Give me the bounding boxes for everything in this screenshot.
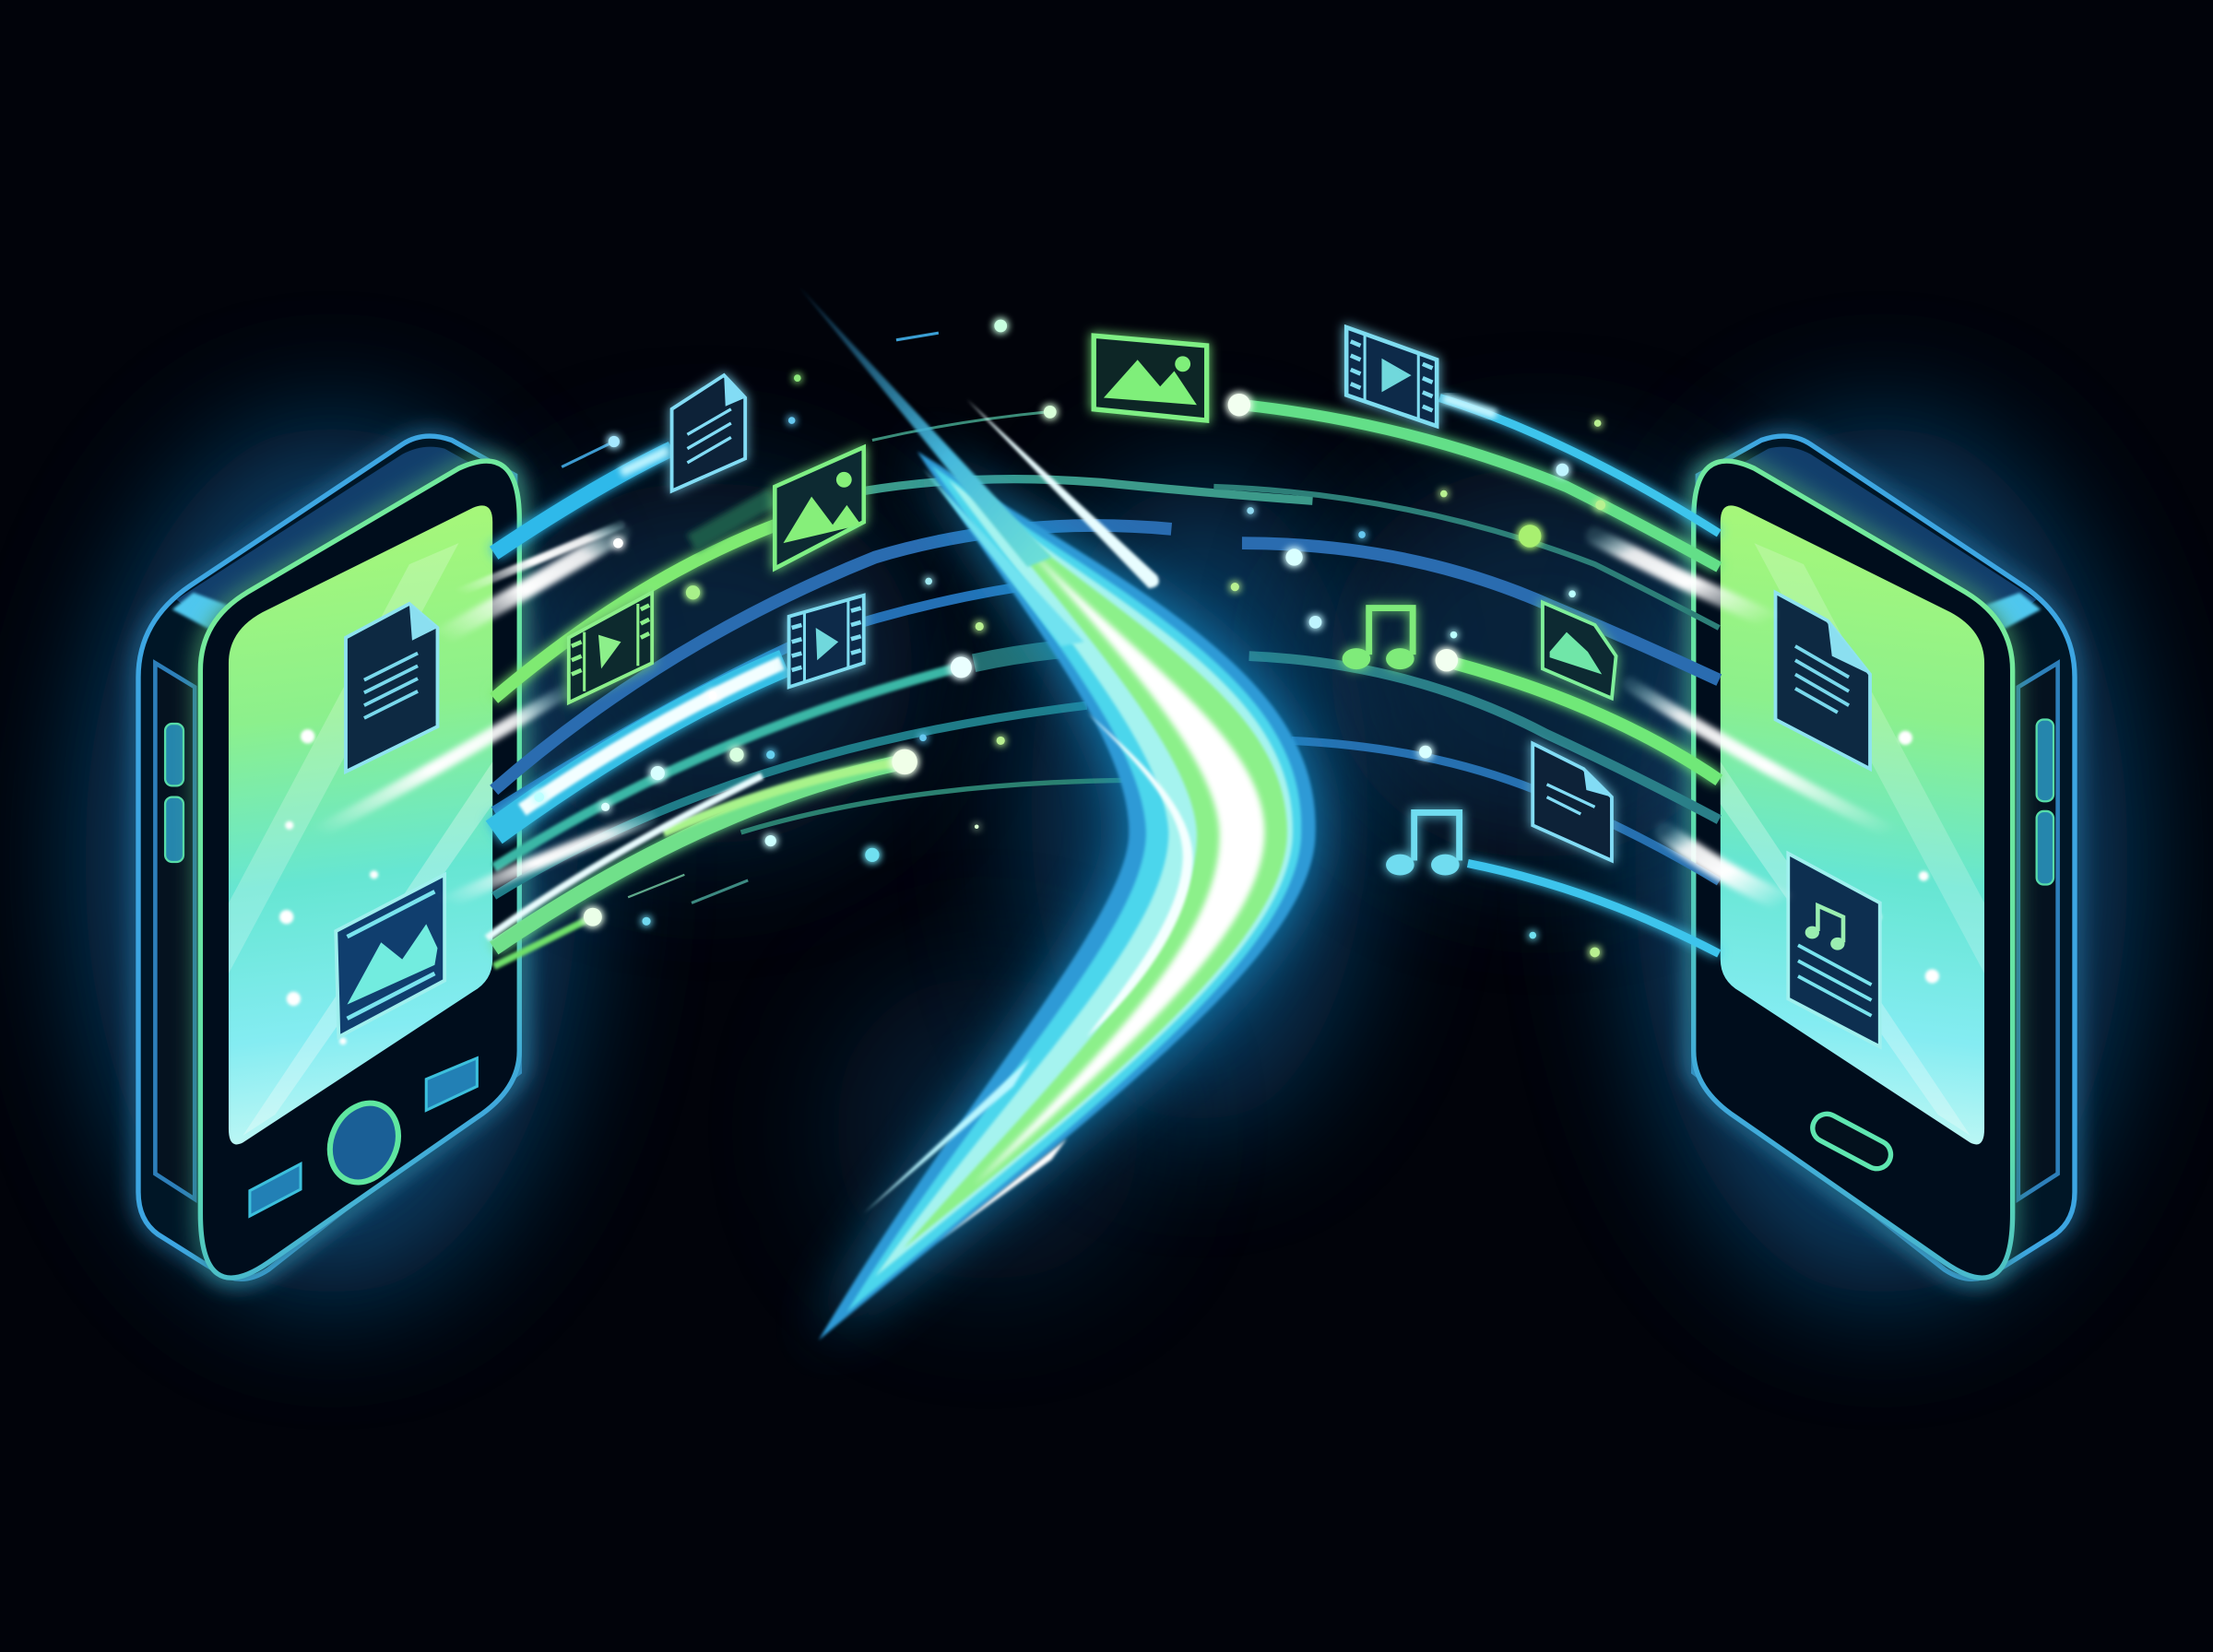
chevron glow bbox=[819, 452, 1316, 1340]
beam: left lower bbox=[446, 819, 649, 903]
left data streams bbox=[487, 333, 1312, 966]
icon: document bbox=[672, 375, 745, 491]
white thin inner streak bbox=[1087, 713, 1192, 1037]
screen diagonal glare lower bbox=[243, 761, 492, 1136]
stream: faint teal arc bbox=[741, 780, 1129, 832]
stream: teal to dot bbox=[494, 667, 960, 867]
lower cyan streak bbox=[864, 1058, 1030, 1213]
chevron pale layer bbox=[875, 479, 1293, 1277]
icon: film cyan bbox=[789, 596, 864, 687]
stream: pale hot end at document bbox=[621, 450, 669, 473]
stream: teal arc two bbox=[1249, 656, 1719, 820]
icon: image green bbox=[775, 447, 864, 569]
right dots bbox=[1231, 419, 1605, 957]
stream: cyan from film bbox=[1439, 398, 1719, 533]
background glows bbox=[85, 423, 2128, 1298]
beam: right green bbox=[1630, 684, 1891, 832]
stream: green from dot bbox=[1242, 405, 1719, 567]
stream: dim teal past dot bbox=[974, 645, 1171, 663]
phone top band bbox=[176, 447, 479, 628]
stream: dim green trail bbox=[692, 497, 774, 543]
small streak bbox=[562, 442, 614, 467]
icon: film cyan top bbox=[1346, 327, 1437, 426]
icon: music note cyan bbox=[1386, 812, 1460, 876]
stream: green core bbox=[663, 761, 901, 832]
beam: right lower bbox=[1665, 832, 1785, 903]
left phone bbox=[138, 436, 519, 1279]
stream: teal arc upper bbox=[864, 479, 1312, 501]
small streak bbox=[872, 412, 1047, 440]
particles bbox=[534, 320, 1605, 957]
phone screen bbox=[229, 505, 492, 1144]
side button upper bbox=[165, 724, 183, 785]
stream: cyan to document bbox=[494, 449, 672, 553]
chevron white core bbox=[974, 543, 1264, 1185]
icon: image green top bbox=[1094, 336, 1207, 420]
stream: green thick to dot bbox=[494, 761, 904, 948]
screen sparkles bbox=[279, 729, 378, 1044]
small streak bbox=[896, 333, 939, 340]
icon: music document on screen bbox=[1788, 854, 1880, 1046]
stream: white core bbox=[522, 663, 782, 809]
stream: green from dot to screen bbox=[1454, 663, 1719, 780]
stream: hot cyan to film bbox=[494, 663, 785, 832]
chevron blue layer bbox=[819, 452, 1316, 1340]
stream: blue arc bbox=[494, 525, 1171, 790]
floating icons left bbox=[569, 327, 1437, 702]
beam: left upper second bbox=[458, 525, 621, 593]
nav button right bbox=[426, 1058, 477, 1110]
beam: right upper bbox=[1595, 537, 1771, 620]
stream: blue arc two bbox=[1292, 740, 1719, 881]
top long thin ray bbox=[799, 287, 1051, 567]
screen diagonal glare bbox=[229, 543, 458, 974]
chevron cyan layer bbox=[846, 466, 1301, 1312]
beam: left upper bbox=[441, 533, 621, 638]
icon: film green bbox=[569, 593, 652, 702]
top white streak bbox=[966, 399, 1159, 588]
nav button left bbox=[250, 1164, 301, 1216]
floating icons right bbox=[1343, 602, 1616, 876]
screen sparkles bbox=[1827, 731, 1939, 984]
stream: teal lower bbox=[494, 705, 1087, 896]
side button lower bbox=[165, 797, 183, 862]
left and center dots bbox=[534, 320, 1250, 926]
central chevron swoosh bbox=[799, 287, 1316, 1340]
phone top highlight bbox=[172, 593, 243, 632]
icon: document on screen bbox=[346, 604, 437, 772]
phone side panel bbox=[155, 663, 195, 1199]
small streak bbox=[692, 880, 748, 903]
icon: image right bbox=[1543, 602, 1616, 699]
icon: document on screen bbox=[1776, 593, 1870, 769]
stream: dim teal arc bbox=[1213, 487, 1719, 628]
stream: bright white lower bbox=[487, 776, 763, 938]
chevron green layer bbox=[904, 497, 1287, 1248]
stream: green to image bbox=[494, 525, 776, 699]
small streak bbox=[628, 875, 684, 897]
stream: pale hot start bbox=[1442, 398, 1496, 415]
home button bbox=[317, 1092, 411, 1194]
beam: left green bbox=[317, 691, 564, 832]
icon: music note green bbox=[1343, 608, 1414, 669]
top cyan streak bbox=[923, 468, 1084, 646]
right phone bbox=[1694, 436, 2075, 1279]
white beams over phones bbox=[317, 525, 1891, 903]
home pill bbox=[1807, 1109, 1896, 1174]
stream: blue second bbox=[494, 581, 1059, 811]
icon: document right bbox=[1533, 743, 1612, 860]
icon: image on screen bbox=[336, 875, 444, 1037]
phone front face bbox=[200, 461, 519, 1278]
phone body back bbox=[138, 436, 519, 1279]
lower bright streak bbox=[939, 1139, 1067, 1242]
stream: blue arc bbox=[1242, 543, 1719, 680]
stream: green to lower dot bbox=[494, 917, 593, 966]
phone body mirrored bbox=[1694, 436, 2075, 1279]
stream: cyan from note bbox=[1468, 864, 1719, 953]
right data streams bbox=[1213, 398, 1719, 953]
